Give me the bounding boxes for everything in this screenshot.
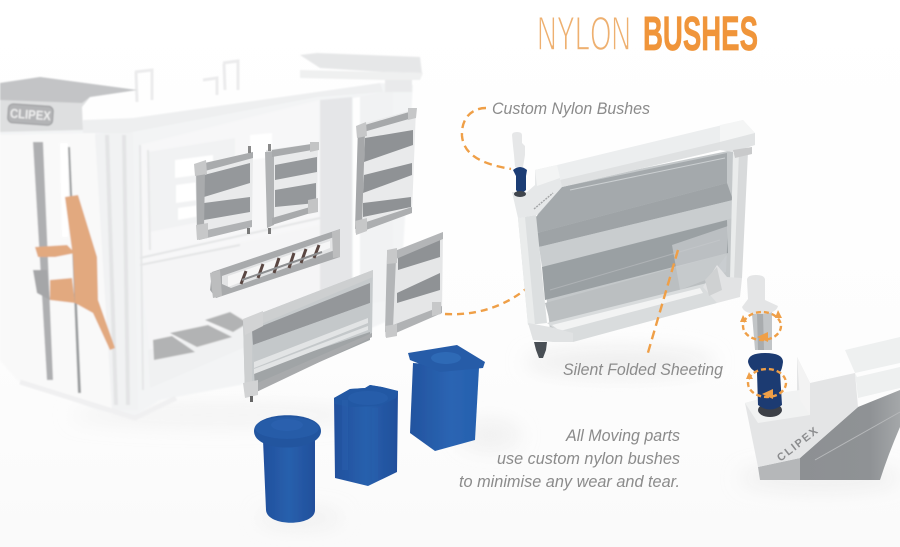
panel: upper middle gate [265, 142, 319, 234]
blue bush [748, 353, 783, 417]
rotation arrows [743, 312, 786, 397]
top frame rail [557, 120, 755, 187]
nylon bushes trio [254, 345, 485, 523]
crush top mechanism [300, 53, 423, 92]
dark bush at bottom [534, 342, 547, 358]
detail corner bracket and rail: CLIPEX [775, 425, 821, 464]
square flanged bush [408, 345, 485, 451]
crush top rails [83, 83, 383, 133]
connector: dashed line from crush to enlarged gate [445, 288, 527, 314]
folded sheeting [535, 150, 733, 330]
faded cattle crush frame [0, 53, 423, 418]
title: NYLON [537, 8, 631, 61]
grooved octagonal bush [334, 385, 398, 486]
white pin [742, 275, 778, 350]
caption: custom nylon bushes: Custom Nylon Bushes [492, 100, 650, 118]
white bolt [512, 132, 525, 167]
caption: silent folded sheeting: Silent Folded Sheeting [563, 361, 723, 379]
panel: small lower right gate [385, 232, 443, 338]
body text [459, 427, 680, 491]
floor plates [153, 312, 248, 360]
panel: upper left gate [194, 146, 253, 240]
panel: lower wide gate [243, 270, 373, 402]
bottom frame rail [547, 283, 717, 342]
left frame rail [518, 215, 547, 325]
blue nylon bush, top [513, 167, 527, 193]
leader: folded sheeting [647, 250, 678, 356]
enlarged gate panel [512, 120, 755, 358]
top corner socket ring [514, 191, 526, 197]
detail: bush and pin close-up [740, 275, 900, 480]
leader: custom nylon bushes [462, 108, 511, 169]
crush logo plate: CLIPEX [9, 106, 52, 123]
dark upright post [33, 142, 53, 380]
exploded side panels [194, 108, 443, 402]
orange head bail mechanism [35, 195, 115, 350]
body text: to minimise any wear and tear. [459, 473, 680, 491]
bottom corner bracket [528, 323, 573, 342]
crush body [0, 61, 413, 418]
crush top plate [0, 77, 137, 132]
ground shadows [70, 348, 900, 526]
body text: All Moving parts [565, 427, 680, 445]
right frame rail [731, 152, 748, 280]
top corner bracket [512, 165, 562, 218]
title: BUSHES [643, 8, 758, 61]
detail corner bracket and rail [745, 337, 900, 480]
round flanged bush [254, 415, 321, 523]
panel: upper right gate [355, 108, 417, 235]
panel: slatted gate with rubber strips [210, 229, 340, 298]
body text: use custom nylon bushes [497, 450, 680, 468]
